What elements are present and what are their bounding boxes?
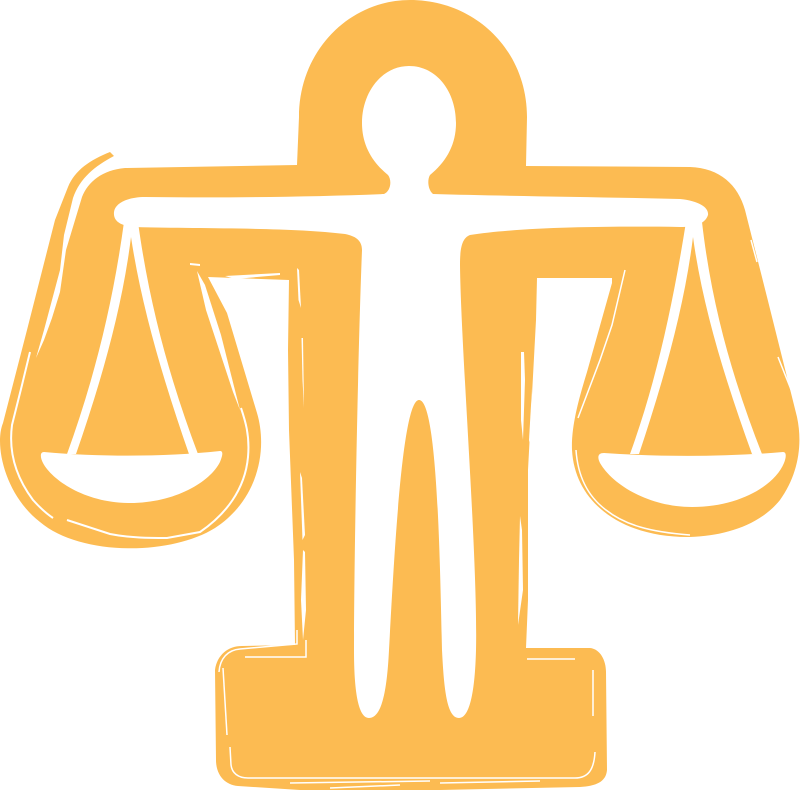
- left pan: [41, 451, 222, 503]
- scale strings and pans: [41, 222, 786, 507]
- right pan: [598, 452, 786, 507]
- brush gaps on stem: [297, 268, 532, 640]
- brush gaps on left pan: [36, 156, 280, 410]
- white body figure: [114, 66, 708, 718]
- brush stroke details on base: [219, 630, 595, 788]
- brush gaps on right pan: [576, 240, 798, 535]
